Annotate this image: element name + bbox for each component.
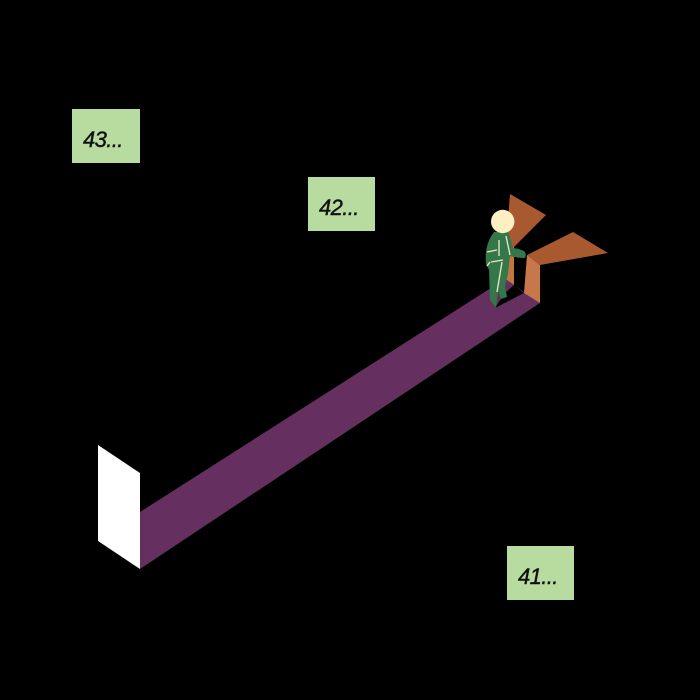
- head: [491, 210, 514, 233]
- note: 42: 42...: [319, 195, 359, 220]
- note: 43: [72, 109, 140, 163]
- arm: [510, 248, 526, 258]
- note: 41: 41...: [518, 564, 558, 589]
- front door wing: [527, 232, 608, 265]
- purple path: [140, 279, 540, 569]
- white door: [98, 445, 140, 569]
- path opening shadow: [495, 285, 524, 308]
- back door frame: [505, 247, 514, 285]
- body and legs: [486, 232, 513, 308]
- note: 43: 43...: [83, 127, 123, 152]
- back door wing: [505, 194, 546, 256]
- note: 42: [308, 177, 375, 231]
- person: [486, 210, 526, 308]
- front door frame: [524, 255, 540, 303]
- suit lines: [487, 236, 510, 292]
- note: 41: [507, 546, 574, 600]
